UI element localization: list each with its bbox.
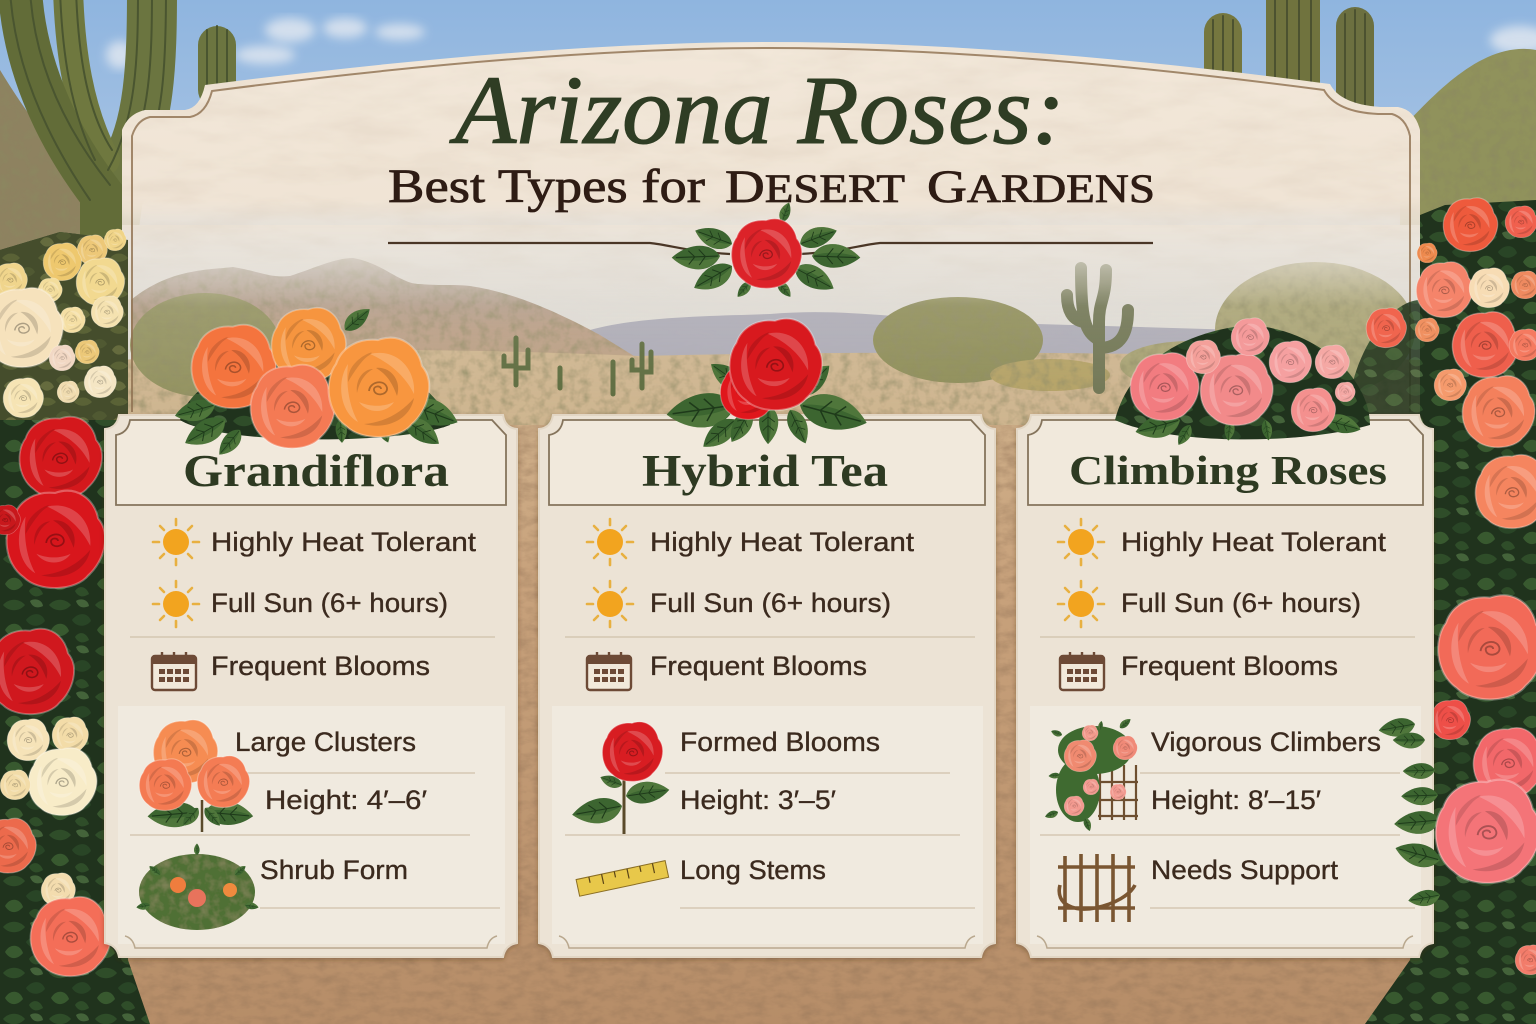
- icon: calendar: [1060, 652, 1104, 690]
- header: [116, 420, 506, 505]
- icon: trellis with roses: [1044, 716, 1138, 832]
- foliage and big roses overlapping the third card: [1377, 716, 1536, 909]
- header: [549, 420, 985, 505]
- card: Grandiflora: Full Sun (6+ hours): [211, 588, 448, 618]
- flowers: pink roses on Climbing Roses: [1115, 318, 1370, 448]
- card: Grandiflora: Shrub Form: [260, 855, 408, 885]
- card: Hybrid Tea: Hybrid Tea: [642, 446, 888, 496]
- card: Grandiflora: [105, 415, 517, 957]
- desert floor: [122, 350, 1420, 425]
- icon: sun: [1058, 519, 1104, 565]
- shrubs: [130, 262, 1415, 398]
- card: Hybrid Tea: Frequent Blooms: [650, 651, 867, 681]
- rose bush: right: [1350, 198, 1536, 1024]
- saguaros: top right group: [1213, 0, 1365, 120]
- subtitle: GARDENS: [927, 161, 1155, 213]
- card: Climbing Roses: Needs Support: [1151, 855, 1339, 885]
- card: Grandiflora: Highly Heat Tolerant: [211, 527, 477, 557]
- subtitle: DESERT: [725, 161, 905, 213]
- icon: sun: [587, 519, 633, 565]
- card: Hybrid Tea: Formed Blooms: [680, 727, 880, 757]
- icon: shrub: [136, 844, 259, 930]
- icon: red rose with stem: [570, 722, 671, 834]
- header: [1028, 420, 1423, 505]
- icon: ruler: [576, 861, 669, 896]
- icon: wooden support: [1058, 854, 1135, 922]
- subtitle: Best Types for: [388, 160, 705, 213]
- saguaro in banner, right: [1067, 268, 1128, 388]
- card: Hybrid Tea: Highly Heat Tolerant: [650, 527, 915, 557]
- saguaro cactus: top left small: [207, 26, 227, 90]
- icon: sun: [153, 519, 199, 565]
- icon: sun: [1058, 581, 1104, 627]
- card: Grandiflora: Grandiflora: [183, 446, 449, 496]
- title: Arizona Roses:: [449, 57, 1065, 165]
- card: Climbing Roses: Climbing Roses: [1069, 447, 1387, 493]
- ornament: divider with rose: [388, 201, 1153, 300]
- ground: [0, 385, 1536, 1024]
- small saguaros: [504, 338, 651, 394]
- far mountains: [590, 312, 1240, 390]
- banner landscape: mountains, shrubs and cacti: [122, 225, 1420, 425]
- flowers: red rose on Hybrid Tea: [664, 319, 871, 455]
- lower panel: [118, 706, 505, 944]
- card: Hybrid Tea: Full Sun (6+ hours): [650, 588, 891, 618]
- card: Climbing Roses: Full Sun (6+ hours): [1121, 588, 1361, 618]
- card: Climbing Roses: Frequent Blooms: [1121, 651, 1338, 681]
- saguaro cactus: far left: [10, 0, 166, 240]
- icon: calendar: [152, 652, 196, 690]
- icon: orange rose cluster: [139, 720, 254, 832]
- card: Grandiflora: Height: 4′–6′: [265, 785, 427, 815]
- icon: calendar: [587, 652, 631, 690]
- card: Climbing Roses: [1017, 415, 1433, 957]
- icon: sun: [153, 581, 199, 627]
- subtitle: [388, 160, 1155, 213]
- flowers: orange roses on Grandiflora: [173, 303, 462, 460]
- left background hill and brush: [0, 70, 130, 420]
- card: Hybrid Tea: Height: 3′–5′: [680, 785, 836, 815]
- banner panel: [122, 42, 1420, 420]
- rose bush: left: [0, 229, 150, 1024]
- lower panel: [552, 706, 983, 944]
- card: Climbing Roses: Vigorous Climbers: [1151, 727, 1381, 757]
- card: Climbing Roses: Highly Heat Tolerant: [1121, 527, 1387, 557]
- right background trees: [1400, 49, 1536, 400]
- card: Grandiflora: Large Clusters: [235, 727, 416, 757]
- card: Climbing Roses: Height: 8′–15′: [1151, 785, 1321, 815]
- main mountains: [131, 258, 660, 400]
- card: Hybrid Tea: [539, 415, 995, 957]
- lower panel: [1030, 706, 1421, 944]
- clouds: [106, 18, 1536, 69]
- card: Grandiflora: Frequent Blooms: [211, 651, 430, 681]
- icon: sun: [587, 581, 633, 627]
- card: Hybrid Tea: Long Stems: [680, 855, 826, 885]
